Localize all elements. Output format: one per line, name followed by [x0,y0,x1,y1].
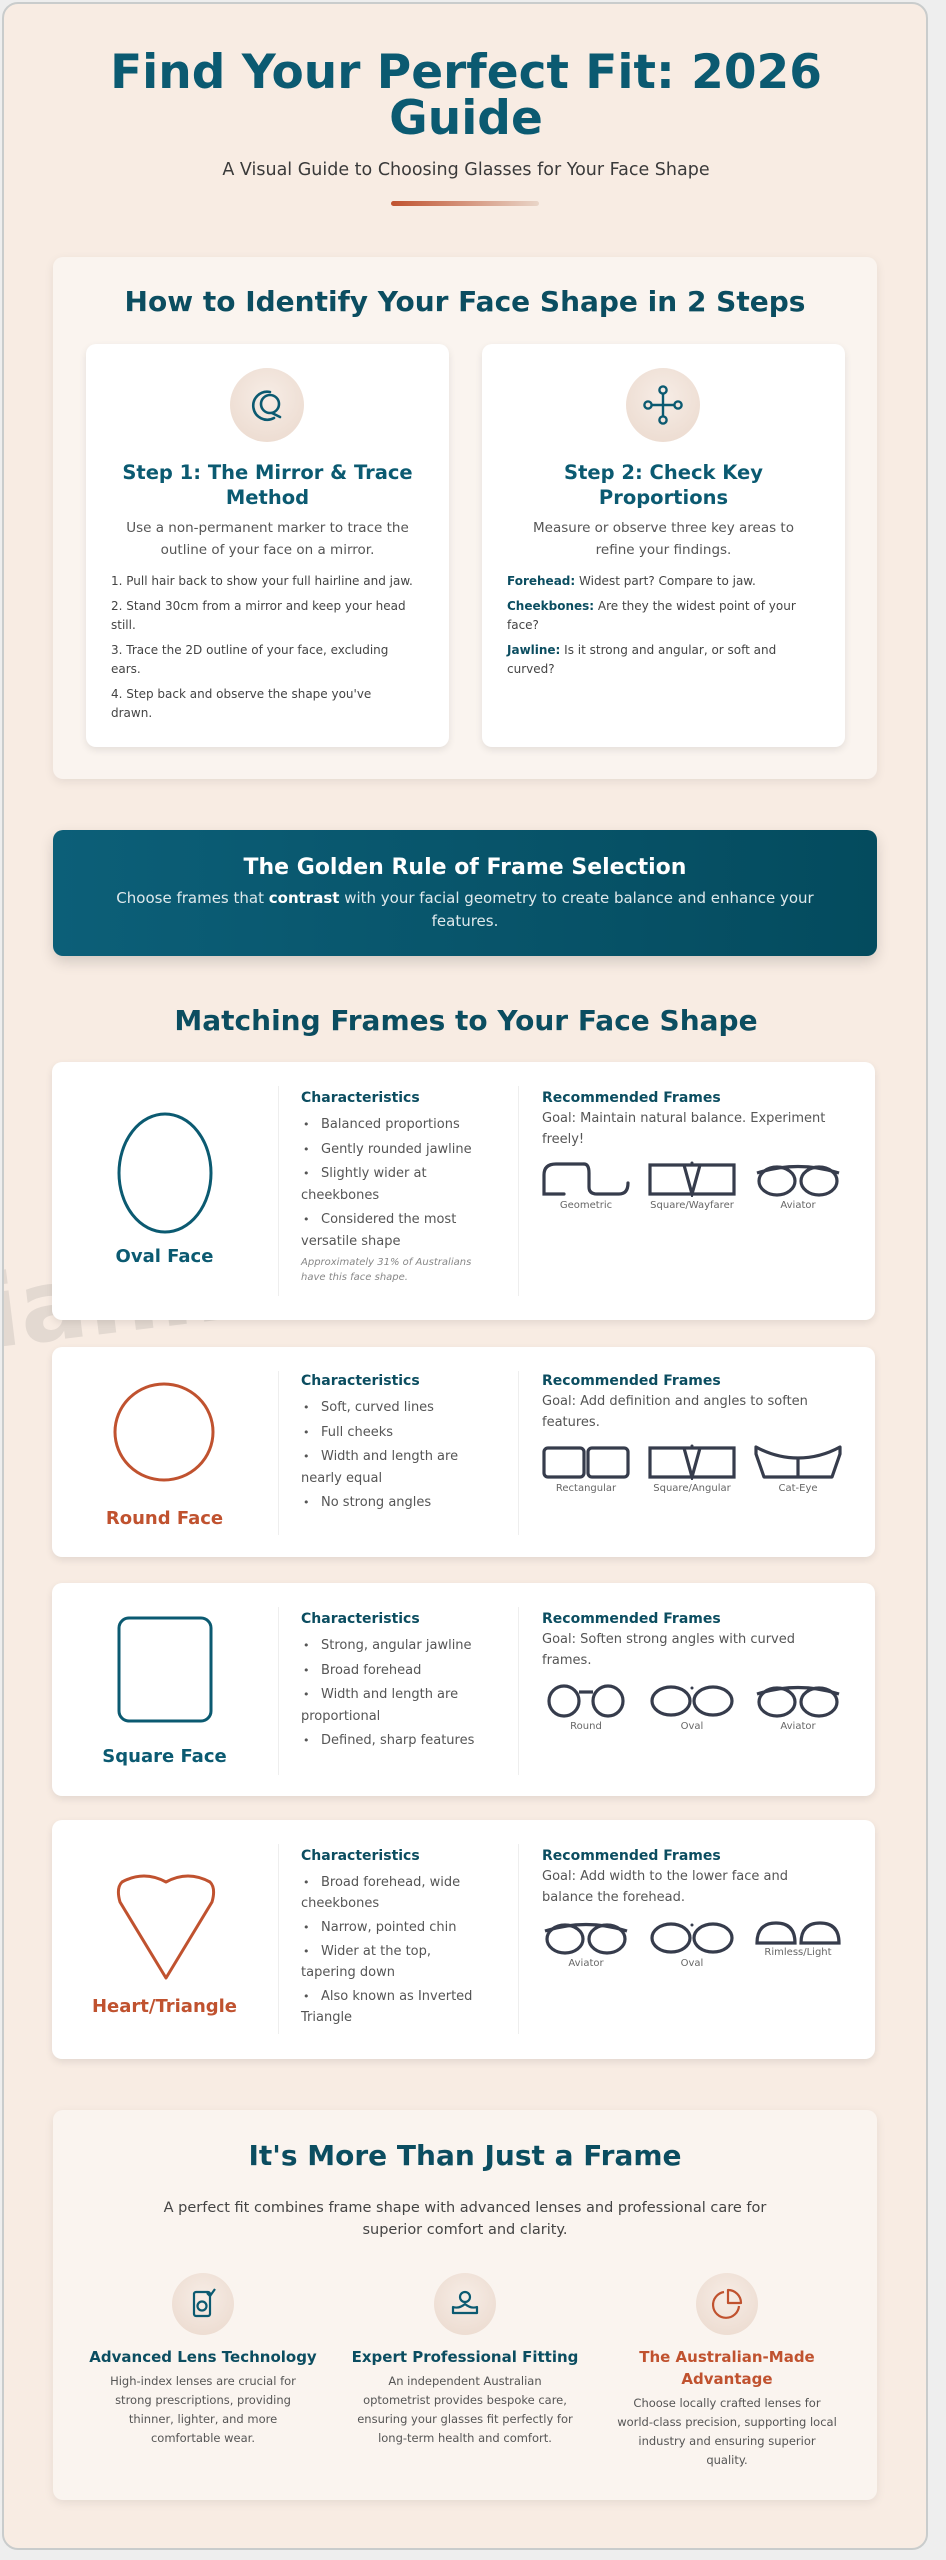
characteristics: oval: Slightly wider at [321,1166,427,1181]
characteristics: oval: • [303,1213,310,1226]
characteristics: round: • [303,1496,310,1509]
recommended frames: oval: freely! [542,1132,584,1147]
feature: professional fitting: ensuring your glasses fit perfectly for [357,2412,573,2426]
characteristics: oval: Considered the most [321,1212,456,1227]
panel: heart face [52,1820,875,2059]
label: square face: Square Face [102,1746,227,1767]
step 2 list: face? [507,618,539,632]
step 1 list: ears. [111,662,141,676]
feature: lens technology: strong prescriptions, providing [115,2393,291,2407]
feature: australian-made: The Australian-Made [639,2348,815,2366]
characteristics: oval: Balanced proportions [321,1117,460,1132]
glasses: rectangular: Rectangular [556,1483,616,1494]
characteristics: oval [300,1090,472,1283]
recommended frames: square: frames. [542,1653,591,1668]
characteristics: heart: Wider at the top, [321,1944,431,1959]
characteristics: square [301,1611,474,1748]
title [110,45,822,146]
characteristics: heart: cheekbones [301,1896,379,1911]
step 2 list: Jawline: Is it strong and angular, or soft and [507,643,776,657]
characteristics: round: Width and length are [321,1449,458,1464]
glasses: aviator [544,1922,628,1969]
glasses: geometric [542,1162,630,1211]
step 1 description: outline of your face on a mirror. [161,542,374,558]
recommended frames: heart: Recommended Frames [542,1848,721,1864]
recommended frames: heart: balance the forehead. [542,1890,685,1905]
feature: professional fitting: Expert Professional Fitting [352,2348,578,2366]
banner title: The Golden Rule of Frame Selection [244,855,686,880]
step 1 list: 3. Trace the 2D outline of your face, excluding [111,643,388,657]
glasses: rectangular [542,1446,630,1494]
feature: lens technology [89,2273,317,2445]
glasses: square/angular [648,1444,736,1494]
characteristics: round [301,1373,458,1510]
glasses: round [547,1684,625,1732]
icon: mirror [230,368,304,442]
divider bar [391,201,539,206]
characteristics: oval: Approximately 31% of Australians [301,1257,471,1268]
step 2 description: refine your findings. [596,542,731,558]
step 2 title: Step 2: Check Key [564,461,763,484]
panel: oval face [52,1062,875,1320]
feature: professional fitting [352,2273,578,2445]
step 1 list: still. [111,618,136,632]
feature: australian-made: Advantage [681,2370,773,2388]
step 1 list: 4. Step back and observe the shape you've [111,687,371,701]
feature: australian-made: Choose locally crafted lenses for [633,2396,821,2410]
step 2 list: Cheekbones: Are they the widest point of your [507,599,796,613]
intro text: superior comfort and clarity. [362,2222,568,2238]
characteristics: heart: Broad forehead, wide [321,1875,460,1890]
label: oval face: Oval Face [116,1246,213,1267]
step 2 description [533,520,794,558]
feature: lens technology: comfortable wear. [151,2431,255,2445]
characteristics: heart: • [303,1876,310,1889]
characteristics: round: Full cheeks [321,1424,393,1440]
glasses: geometric: Geometric [560,1200,612,1211]
recommended frames: round [542,1373,842,1494]
characteristics: square: • [303,1734,310,1747]
glasses: oval: Oval [681,1721,703,1732]
characteristics: heart: Characteristics [301,1848,420,1864]
recommended frames: oval: Goal: Maintain natural balance. Experiment [542,1111,825,1126]
characteristics: heart: Narrow, pointed chin [321,1920,456,1935]
panel: square face [52,1583,875,1796]
characteristics: oval: • [303,1142,310,1156]
step 1 card [86,344,449,747]
characteristics: square: • [303,1688,310,1701]
intro text [164,2200,766,2238]
glasses: square/wayfarer: Square/Wayfarer [650,1200,734,1211]
characteristics: round: nearly equal [301,1470,382,1486]
glasses: aviator [756,1686,840,1732]
step 2 list: Forehead: Widest part? Compare to jaw. [507,574,756,588]
feature: lens technology: thinner, lighter, and more [129,2412,277,2426]
feature: professional fitting: An independent Australian [388,2374,542,2388]
glasses: aviator [756,1164,840,1211]
glasses: aviator: Aviator [780,1200,816,1211]
glasses: cat-eye: Cat-Eye [778,1483,818,1494]
glasses: aviator: Aviator [568,1958,604,1969]
feature: lens technology: Advanced Lens Technology [89,2348,317,2366]
step 1 description: Use a non-permanent marker to trace the [126,520,409,536]
title: Guide [389,91,543,146]
intro text: A perfect fit combines frame shape with advanced lenses and professional care for [164,2200,766,2216]
step 1 list: 2. Stand 30cm from a mirror and keep your head [111,599,406,613]
icon: person [434,2273,496,2335]
feature: australian-made: world-class precision, supporting local [617,2415,837,2429]
characteristics: square: Width and length are [321,1687,458,1702]
recommended frames: square [542,1611,840,1732]
glasses: square/wayfarer [648,1162,736,1211]
icon: proportions [626,368,700,442]
feature: professional fitting: long-term health and comfort. [378,2431,552,2445]
recommended frames: oval: Recommended Frames [542,1090,721,1106]
glasses: square/angular: Square/Angular [653,1483,731,1494]
heading: matching frames: Matching Frames to Your Face Shape [174,1004,758,1037]
characteristics: oval: • [303,1118,310,1131]
step 1 list [111,574,413,720]
glasses: oval [650,1685,734,1732]
characteristics: oval: have this face shape. [301,1272,408,1283]
step 2 title: Proportions [599,486,728,509]
recommended frames: square: Recommended Frames [542,1611,721,1627]
step 2 description: Measure or observe three key areas to [533,520,794,536]
subtitle: A Visual Guide to Choosing Glasses for Your Face Shape [222,160,710,180]
characteristics: round: Soft, curved lines [321,1400,434,1415]
title: Find Your Perfect Fit: 2026 [110,45,822,100]
step 2 card [482,344,845,747]
recommended frames: heart [542,1848,841,1969]
feature: australian-made [617,2273,837,2467]
characteristics: round: • [303,1401,310,1414]
characteristics: oval: cheekbones [301,1188,379,1202]
panel: round face [52,1347,875,1557]
characteristics: heart: tapering down [301,1965,395,1980]
step 2 list [506,574,796,676]
heading: It's More Than Just a Frame [248,2139,682,2172]
recommended frames: round: features. [542,1415,600,1430]
characteristics: round: No strong angles [321,1495,431,1510]
characteristics: heart [300,1848,472,2025]
feature: australian-made: industry and ensuring superior [638,2434,816,2448]
glasses: oval [650,1922,734,1969]
feature: australian-made: quality. [706,2453,748,2467]
characteristics: round: Characteristics [301,1373,420,1389]
step 1 description [126,520,409,558]
characteristics: square: • [303,1664,310,1676]
characteristics: round: • [303,1450,310,1463]
step 1 list: 1. Pull hair back to show your full hairline and jaw. [111,574,413,588]
characteristics: oval: Characteristics [301,1090,420,1106]
characteristics: oval: • [303,1167,310,1180]
icon: lens [172,2273,234,2335]
feature: professional fitting: optometrist provides bespoke care, [363,2393,567,2407]
characteristics: square: Broad forehead [321,1662,421,1678]
banner text: Choose frames that contrast with your facial geometry to create balance and enhance your [116,889,814,907]
characteristics: heart: • [303,1990,310,2003]
recommended frames: square: Goal: Soften strong angles with curved [542,1632,795,1647]
recommended frames: oval [542,1090,840,1211]
step 1 title: Step 1: The Mirror & Trace [122,461,413,484]
glasses: rimless [755,1921,841,1958]
characteristics: square: Characteristics [301,1611,420,1627]
glasses: aviator: Aviator [780,1721,816,1732]
panel: more than a frame [53,2110,877,2500]
characteristics: square: Defined, sharp features [321,1733,474,1748]
step 1 title [122,461,413,509]
heading: How to Identify Your Face Shape in 2 Steps [125,285,805,318]
banner text [116,889,814,930]
glasses: rimless: Rimless/Light [764,1947,832,1958]
recommended frames: round: Recommended Frames [542,1373,721,1389]
banner: golden rule [53,830,877,956]
icon: square face [118,1616,212,1722]
label: round face: Round Face [106,1508,223,1529]
characteristics: heart: Also known as Inverted [321,1989,472,2004]
feature: lens technology: High-index lenses are crucial for [110,2374,296,2388]
step 1 title: Method [226,486,309,509]
icon: pie chart [696,2273,758,2335]
panel: how to identify [53,257,877,779]
characteristics: heart: • [303,1945,310,1958]
characteristics: square: • [303,1639,310,1652]
characteristics: round: • [303,1426,310,1438]
banner text: features. [432,912,498,930]
step 2 list: curved? [507,662,555,676]
step 1 list: drawn. [111,706,152,720]
glasses: round: Round [570,1721,602,1732]
label: heart face: Heart/Triangle [92,1996,237,2017]
glasses: cat-eye [754,1445,842,1494]
recommended frames: heart: Goal: Add width to the lower face and [542,1869,788,1884]
characteristics: square: Strong, angular jawline [321,1638,472,1653]
characteristics: oval: Gently rounded jawline [321,1142,472,1156]
characteristics: oval: versatile shape [301,1234,400,1248]
icon: round face [114,1382,214,1482]
icon: oval face [118,1112,212,1234]
recommended frames: round: Goal: Add definition and angles to soften [542,1394,808,1409]
characteristics: heart: • [303,1921,310,1934]
icon: heart face [116,1874,216,1980]
glasses: oval: Oval [681,1958,703,1969]
characteristics: heart: Triangle [301,2010,352,2025]
characteristics: square: proportional [301,1708,380,1724]
step 2 title [564,461,763,509]
